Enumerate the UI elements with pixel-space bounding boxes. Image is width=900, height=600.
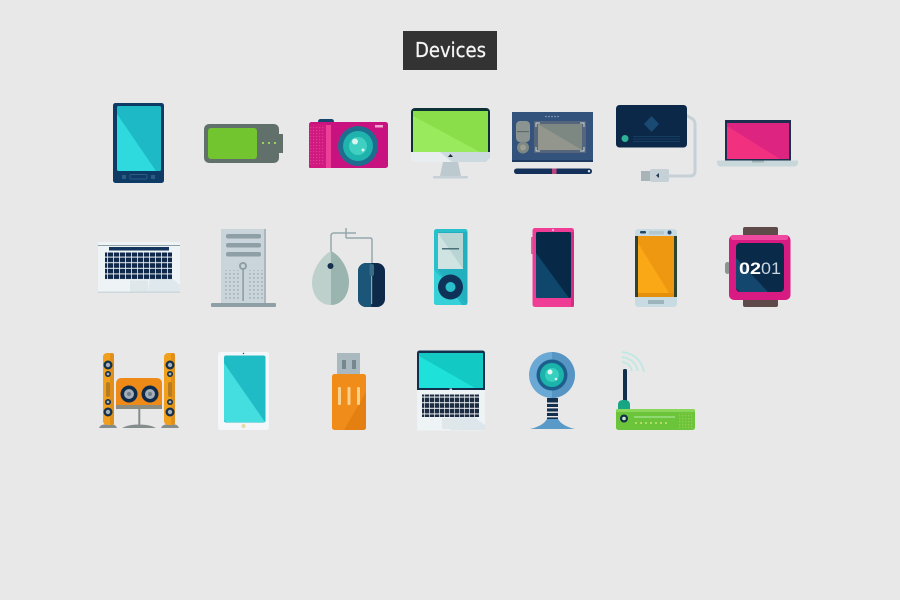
icon: graphics tablet and pen xyxy=(512,112,593,174)
icon: battery xyxy=(204,124,283,163)
icon: smartphone orange xyxy=(635,229,677,307)
icon: music player xyxy=(434,229,468,305)
title xyxy=(403,31,497,70)
pen xyxy=(514,168,592,174)
icon: tablet white xyxy=(218,352,269,430)
icon: webcam xyxy=(529,352,575,429)
icon: smartphone navy xyxy=(113,103,164,183)
watch time: 01 xyxy=(761,259,781,278)
icon: laptop pink xyxy=(717,120,798,166)
icon: smartphone pink xyxy=(531,228,574,307)
icon: speaker system xyxy=(99,353,179,428)
icon: desktop monitor xyxy=(411,108,490,178)
watch time xyxy=(739,259,781,278)
icon: wireless router xyxy=(616,352,695,430)
icon: mouse pair xyxy=(312,228,385,307)
watch time: 02 xyxy=(739,259,761,278)
title: Devices xyxy=(415,38,486,62)
icon: desktop tower xyxy=(211,229,276,307)
icon: laptop teal xyxy=(417,350,485,430)
icon: open laptop top view xyxy=(98,242,180,293)
icon: smartwatch xyxy=(725,227,790,307)
icon: USB flash drive xyxy=(332,353,366,430)
icon: camera xyxy=(309,119,388,168)
icon: external hard drive with USB cable xyxy=(616,105,695,182)
